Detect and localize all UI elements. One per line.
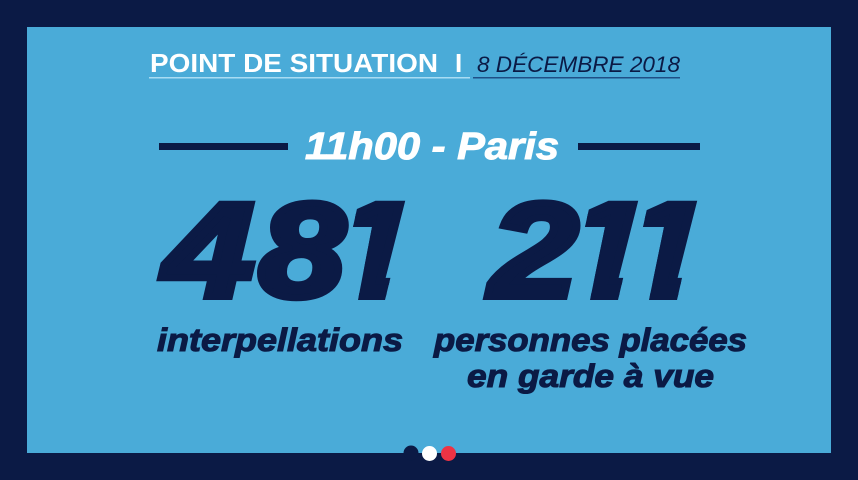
time and place heading: 11h00 - Paris: [305, 126, 559, 168]
number: 481: 4: [160, 176, 254, 326]
date underline: [473, 77, 680, 78]
heading: point de situation: POINT DE SITUATION: [150, 48, 438, 78]
label: personnes placées en garde à vue: personnes placées: [433, 322, 747, 358]
date: 8 DÉCEMBRE 2018: [477, 52, 681, 77]
left rule: [159, 143, 288, 150]
heading underline: white: [149, 77, 470, 78]
label: personnes placées en garde à vue: [433, 322, 747, 394]
label: interpellations: interpellations: [157, 322, 403, 358]
number: 211: 2: [486, 176, 578, 326]
heading: point de situation: I: [455, 48, 462, 78]
number: 211: 1: [612, 176, 709, 326]
tricolour dots: [404, 446, 456, 461]
number: 481: 8: [259, 176, 346, 326]
number: 481: 1: [320, 176, 417, 326]
number: 211: [482, 199, 698, 300]
right rule: [578, 143, 700, 150]
number: 211: 1: [553, 176, 650, 326]
number: 481: [156, 200, 406, 302]
label: personnes placées en garde à vue: en garde à vue: [467, 358, 714, 394]
